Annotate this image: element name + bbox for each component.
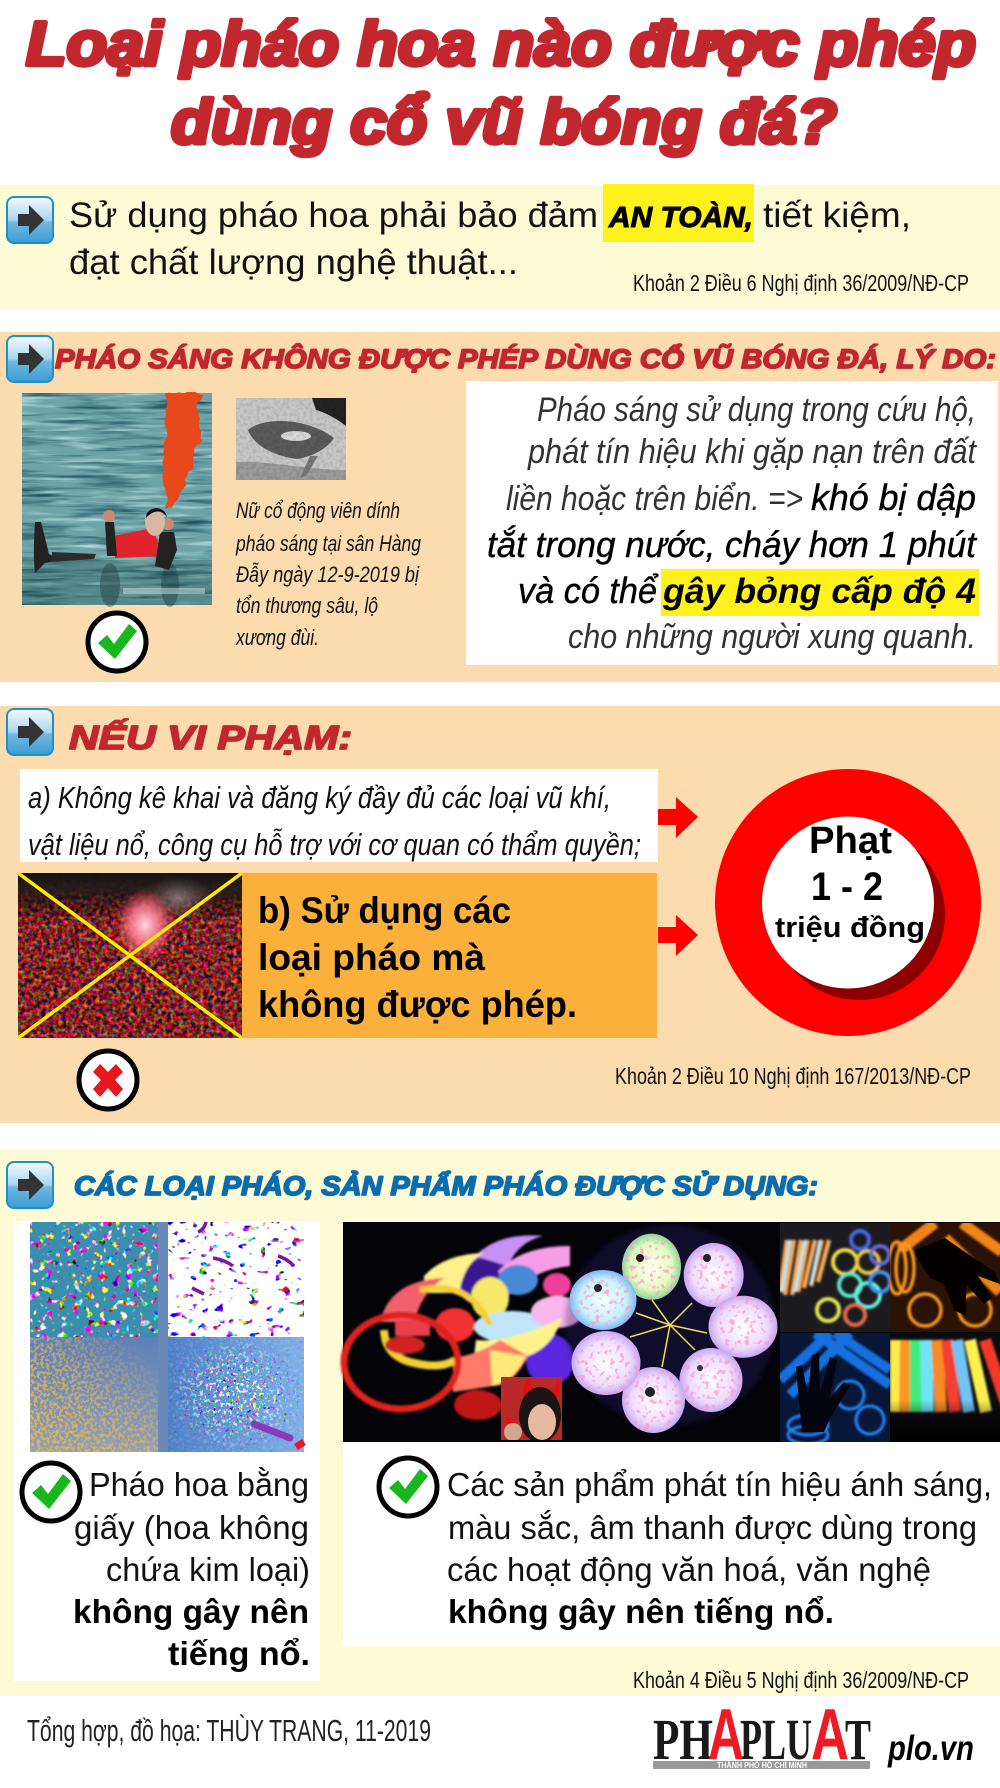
title: Loại pháo hoa nào được phép [26,10,976,79]
photo caption: xương đùi. [235,625,319,650]
card text [447,1466,992,1630]
violation b: không được phép. [258,984,577,1025]
explanation box: gây bỏng cấp độ 4 [662,572,976,611]
card text: tiếng nổ. [168,1635,310,1672]
safety rule text [69,196,911,282]
card text: màu sắc, âm thanh được dùng trong [448,1509,977,1546]
logo: Pháp Luật: PH [653,1707,713,1772]
section heading: PHÁO SÁNG KHÔNG ĐƯỢC PHÉP DÙNG CỔ VŨ BÓNG ĐÁ, LÝ DO: [55,343,996,374]
photo: stadium crowd crossed out [18,873,242,1038]
photo: burn wound [236,398,346,480]
card text: không gây nên [73,1593,309,1630]
section heading: NẾU VI PHẠM: [69,719,352,756]
card text: Các sản phẩm phát tín hiệu ánh sáng, [447,1466,992,1503]
glow sticks top left [780,1223,890,1332]
section heading: CÁC LOẠI PHÁO, SẢN PHẨM PHÁO ĐƯỢC SỬ DỤNG: [74,1169,818,1201]
explanation box: tắt trong nước, cháy hơn 1 phút [487,524,978,565]
panel: permitted fireworks [0,1149,1000,1696]
icon: arrow button [7,336,53,382]
safety rule text: AN TOÀN, [608,201,753,234]
photo caption: Đẫy ngày 12-9-2019 bị [236,562,420,587]
fine badge: triệu đồng [775,912,925,944]
title: dùng cổ vũ bóng đá? [171,88,837,157]
card text: giấy (hoa không [74,1509,309,1546]
logo: Pháp Luật: T [845,1707,871,1772]
yellow highlight [603,184,754,242]
icon: green check [22,1463,80,1521]
balloons [565,1225,785,1435]
card: light products [343,1222,1000,1646]
card: paper fireworks [14,1221,320,1681]
logo: plo.vn: plo.vn [887,1729,974,1768]
card text: các hoạt động văn hoá, văn nghệ [447,1551,931,1588]
photo: man in water with flare [22,393,212,607]
inset photo: fan with horns [501,1377,562,1443]
icon: red cross [79,1051,137,1109]
fine badge: Phạt [809,820,892,862]
arrow a [658,797,698,838]
logo: Pháp Luật: A [708,1695,744,1775]
card text: Pháo hoa bằng [89,1466,309,1503]
explanation box: khó bị dập [811,477,976,518]
safety rule text: Sử dụng pháo hoa phải bảo đảm [69,196,598,235]
fine badge [715,769,981,1036]
glowing headbands [344,1235,583,1420]
logo: Pháp Luật: A [811,1695,849,1775]
fine badge: 1 - 2 [811,865,883,909]
explanation box: và có thể [518,570,659,611]
safety rule text: đạt chất lượng nghệ thuật... [69,243,518,282]
explanation box [466,381,998,665]
title [26,10,976,157]
panel: penalties [0,706,1000,1123]
arrow b [658,915,698,956]
icon: arrow button [7,709,53,755]
card text [73,1466,310,1672]
footer credit: Tổng hợp, đồ họa: THÙY TRANG, 11-2019 [27,1713,431,1748]
panel: safety rule [0,184,1000,310]
safety rule text: tiết kiệm, [763,196,911,235]
icon: green check [379,1458,437,1516]
card text: chứa kim loại) [106,1551,310,1588]
glow sticks bottom right [890,1333,1000,1415]
violation a: vật liệu nổ, công cụ hỗ trợ với cơ quan có thẩm quyền; [28,827,641,862]
violation b: loại pháo mà [258,937,485,978]
logo: Pháp Luật: THÀNH PHỐ HỒ CHÍ MINH [717,1760,807,1770]
photo caption: tổn thương sâu, lộ [236,593,378,618]
glow sticks bottom left [780,1333,890,1444]
glow sticks top right [888,1223,1000,1332]
logo: Pháp Luật: PLU [740,1707,812,1772]
icon: arrow button [7,1162,53,1208]
photo caption [235,498,422,650]
icon: arrow button [7,197,53,243]
explanation box: liền hoặc trên biển. => [506,480,803,518]
photo caption: pháo sáng tại sân Hàng [235,531,422,556]
panel: flares not allowed [0,332,1000,682]
violation a [20,769,658,862]
photo: glowing products collage [343,1222,1000,1444]
photo: confetti collage [30,1222,304,1452]
violation b [242,873,657,1038]
card text: không gây nên tiếng nổ. [448,1593,834,1630]
photo caption: Nữ cổ động viên dính [236,498,400,523]
violation a: a) Không kê khai và đăng ký đầy đủ các loại vũ khí, [28,780,611,815]
violation b: b) Sử dụng các [258,890,511,931]
icon: green check [88,613,146,671]
logo: Pháp Luật [653,1695,871,1775]
